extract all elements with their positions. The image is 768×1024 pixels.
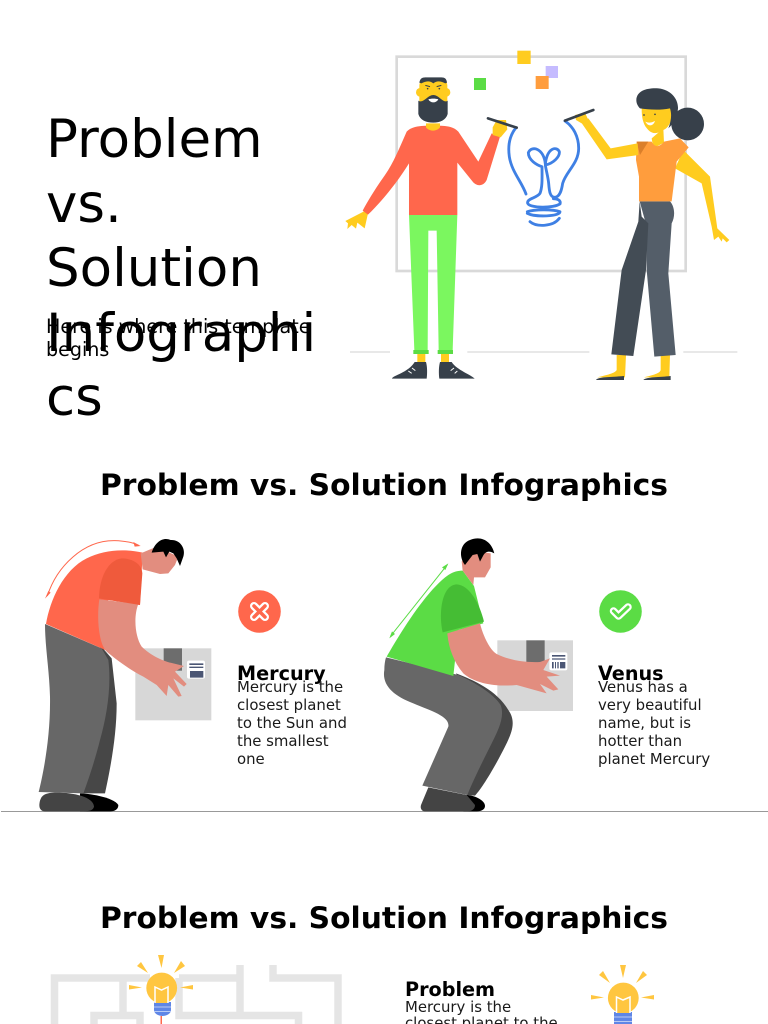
text block: Venus: planet Mercury — [598, 750, 710, 768]
illustration: bent-back lifting — [39, 539, 211, 811]
text block: Mercury: Mercury — [237, 662, 326, 685]
illustration: two people drawing a light bulb on a whiteboard — [345, 51, 737, 380]
title: cs — [46, 367, 103, 428]
text block: Mercury: the smallest — [237, 732, 329, 750]
man — [345, 77, 517, 379]
text block: Venus: Venus has a — [598, 678, 688, 696]
maze — [54, 965, 338, 1024]
title: vs. — [46, 174, 122, 235]
ground line — [1, 811, 768, 812]
text block: Mercury: to the Sun and — [237, 714, 347, 732]
woman — [565, 88, 729, 380]
subtitle: Here is where this template — [46, 315, 310, 338]
subtitle — [46, 315, 310, 361]
subtitle: begins — [46, 338, 109, 361]
text block: Venus — [598, 662, 710, 768]
text block: Venus: very beautiful — [598, 696, 702, 714]
text block: Problem: Problem — [405, 978, 495, 1001]
title — [46, 109, 316, 428]
text block: Problem — [405, 978, 558, 1024]
title: Solution — [46, 238, 262, 299]
icon: light bulb in maze — [129, 955, 193, 1024]
title: Problem — [46, 109, 263, 170]
section heading: Problem vs. Solution Infographics — [100, 901, 668, 936]
text block: Mercury — [237, 662, 347, 768]
section heading: Problem vs. Solution Infographics — [100, 468, 668, 503]
text block: Mercury: Mercury is the — [237, 678, 343, 696]
text block: Mercury: closest planet — [237, 696, 341, 714]
text block: Venus: hotter than — [598, 732, 682, 750]
illustration: straight-back lifting — [384, 538, 573, 811]
icon: light bulb — [591, 965, 654, 1024]
text block: Problem: Mercury is the — [405, 998, 511, 1016]
text block: Venus: name, but is — [598, 714, 691, 732]
text block: Mercury: one — [237, 750, 265, 768]
text block: Venus: Venus — [598, 662, 664, 685]
icon: check badge — [599, 590, 642, 633]
title: Infographi — [46, 303, 316, 364]
icon: cross badge — [238, 590, 281, 633]
